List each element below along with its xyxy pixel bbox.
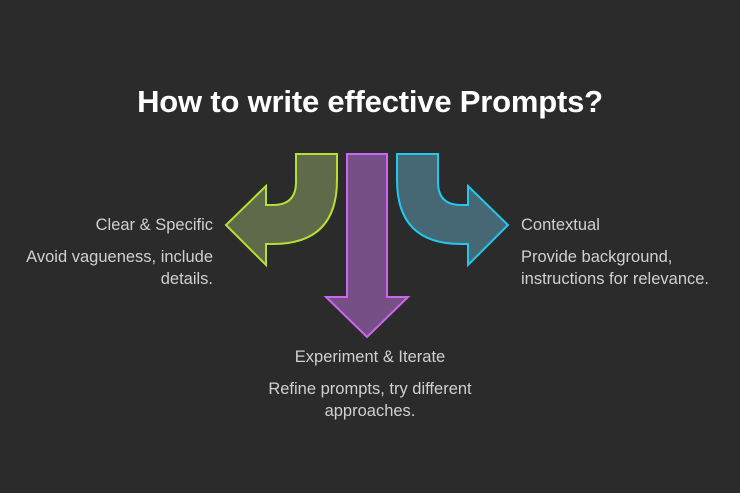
text: Clear & Specific: Clear & Specific — [96, 216, 213, 234]
text: Contextual: Contextual — [521, 216, 600, 234]
arrow: right cyan — [397, 154, 508, 265]
text: clear desc: Avoid vagueness, include details. — [26, 248, 213, 288]
arrow: down purple — [326, 154, 408, 337]
text: experiment desc: Refine prompts, try different approaches. — [268, 380, 472, 420]
text: Experiment & Iterate: Experiment & Iterate — [295, 348, 445, 366]
arrow: left green — [226, 154, 337, 265]
title: How to write effective Prompts? — [137, 84, 603, 119]
text: contextual desc: Provide background, instructions for relevance. — [521, 248, 709, 288]
